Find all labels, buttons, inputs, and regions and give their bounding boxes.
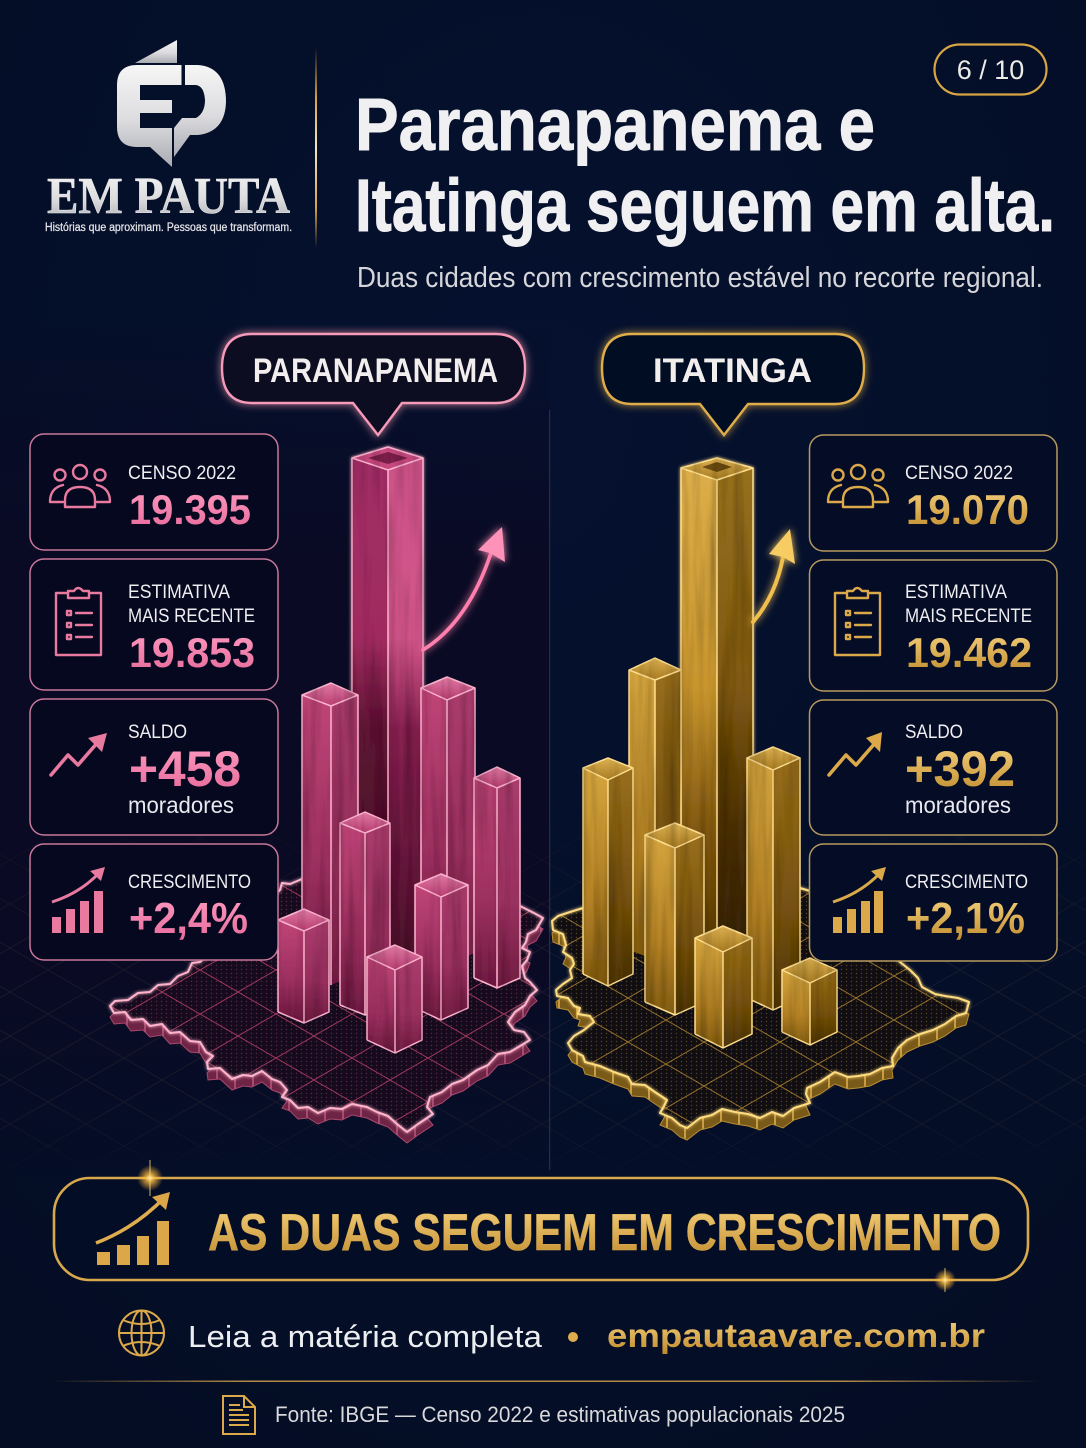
map: Paranapanema bbox=[110, 879, 543, 1143]
panel: Paranapanema census: CENSO 2022 bbox=[128, 463, 236, 484]
pink bars bbox=[278, 447, 520, 1053]
bar 3 bbox=[421, 677, 475, 965]
wordmark: EM PAUTA bbox=[47, 168, 290, 225]
bar 5 bbox=[340, 812, 390, 1015]
page counter bbox=[934, 44, 1046, 94]
sparkles bbox=[137, 1160, 956, 1292]
panel: Itatinga census: CENSO 2022 bbox=[905, 463, 1013, 484]
panel: Paranapanema growth: +2,4% bbox=[129, 894, 248, 943]
bar 8 bbox=[367, 945, 422, 1053]
logo: Em Pauta bbox=[45, 40, 292, 234]
page counter: 6 / 10 bbox=[957, 55, 1024, 85]
bar 6 bbox=[415, 874, 468, 1020]
label: Paranapanema: PARANAPANEMA bbox=[253, 352, 498, 390]
panel: Paranapanema balance: moradores bbox=[128, 792, 234, 818]
icon: people bbox=[50, 465, 110, 507]
bar 1: tallest bbox=[352, 447, 423, 1000]
panel: Paranapanema estimate bbox=[30, 559, 278, 690]
bar 1: tallest bbox=[681, 458, 753, 990]
panel: Itatinga estimate bbox=[810, 560, 1057, 691]
arrow: pink growth bbox=[423, 527, 505, 650]
title bbox=[355, 83, 1055, 247]
panel: Paranapanema census: 19.395 bbox=[129, 486, 251, 533]
title: Paranapanema e bbox=[355, 83, 875, 166]
panel: Itatinga census bbox=[810, 435, 1057, 551]
panel: Paranapanema balance bbox=[30, 699, 278, 835]
icon: bars and arrow bbox=[833, 867, 886, 933]
icon: clipboard bbox=[835, 588, 880, 655]
icon: trend arrow bbox=[51, 733, 107, 775]
bar 3 bbox=[583, 758, 633, 986]
call to action: Leia a matéria completa bbox=[188, 1319, 543, 1354]
panel: Itatinga growth: CRESCIMENTO bbox=[905, 872, 1028, 893]
source bbox=[223, 1396, 845, 1434]
bar 6 bbox=[695, 926, 752, 1048]
panel: Paranapanema balance: SALDO bbox=[128, 722, 187, 743]
panel: Itatinga estimate: MAIS RECENTE bbox=[905, 606, 1032, 627]
label: Itatinga: ITATINGA bbox=[653, 352, 812, 390]
panel: Paranapanema estimate: ESTIMATIVA bbox=[128, 582, 230, 603]
bar 2 bbox=[302, 683, 358, 985]
panel: Paranapanema growth bbox=[30, 844, 278, 960]
bar 4 bbox=[474, 767, 520, 988]
icon: document bbox=[223, 1396, 255, 1434]
panel: Itatinga census: 19.070 bbox=[906, 486, 1029, 533]
panel: Itatinga estimate: ESTIMATIVA bbox=[905, 582, 1007, 603]
bar 7 bbox=[278, 909, 329, 1023]
header divider bbox=[315, 48, 317, 248]
map: Itatinga bbox=[552, 888, 969, 1140]
banner: conclusion bbox=[54, 1160, 1028, 1292]
panel: Itatinga growth: +2,1% bbox=[906, 894, 1025, 943]
label: Paranapanema bbox=[222, 334, 525, 435]
bar 5 bbox=[645, 823, 704, 1015]
panel: Itatinga estimate: 19.462 bbox=[906, 629, 1032, 676]
tagline: Histórias que aproximam. Pessoas que transformam. bbox=[45, 222, 292, 234]
call to action: empautaavare.com.br bbox=[607, 1317, 985, 1354]
panel: Itatinga balance bbox=[810, 700, 1057, 835]
call to action bbox=[119, 1310, 985, 1356]
icon: people bbox=[828, 465, 888, 507]
icon: growth chart bbox=[96, 1192, 170, 1265]
icon: trend arrow bbox=[829, 732, 882, 775]
panel: Itatinga balance: SALDO bbox=[905, 722, 963, 743]
bar 2 bbox=[629, 658, 681, 960]
panel: Itatinga balance: +392 bbox=[905, 741, 1015, 797]
panel: Itatinga growth bbox=[810, 844, 1057, 961]
bar 4 bbox=[747, 747, 800, 1010]
source: Fonte: IBGE — Censo 2022 e estimativas populacionais 2025 bbox=[275, 1402, 845, 1427]
background bbox=[0, 410, 1086, 1170]
gold bars bbox=[583, 458, 837, 1048]
panel: Paranapanema estimate: MAIS RECENTE bbox=[128, 606, 255, 627]
panel: Paranapanema growth: CRESCIMENTO bbox=[128, 872, 251, 893]
icon: clipboard bbox=[56, 588, 101, 655]
panel: Itatinga balance: moradores bbox=[905, 792, 1011, 818]
label: Itatinga bbox=[602, 334, 864, 435]
bar 7 bbox=[782, 958, 837, 1045]
panel: Paranapanema estimate: 19.853 bbox=[129, 629, 255, 676]
arrow: gold growth bbox=[753, 529, 795, 622]
panel: Paranapanema balance: +458 bbox=[129, 741, 241, 797]
icon: bars and arrow bbox=[52, 867, 105, 933]
icon: EP speech bubble mark bbox=[117, 40, 226, 167]
panel: Paranapanema census bbox=[30, 434, 278, 550]
icon: globe bbox=[119, 1310, 164, 1356]
